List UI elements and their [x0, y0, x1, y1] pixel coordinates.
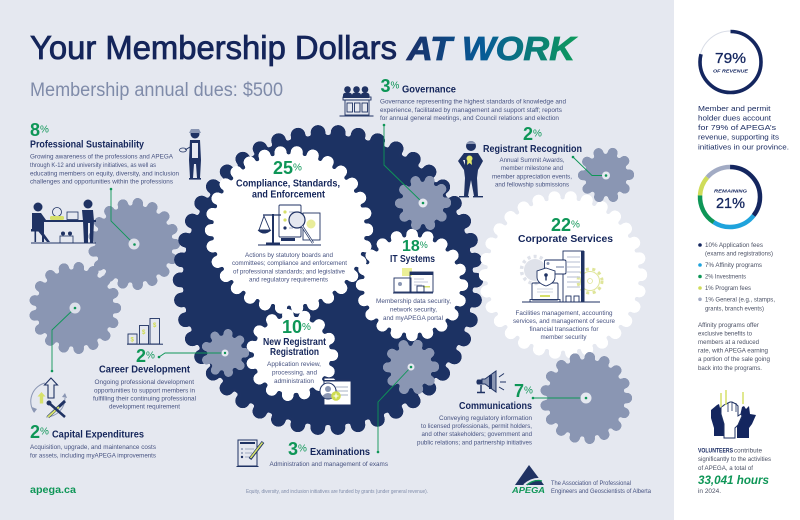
description: Conveying regulatory information: [439, 416, 532, 422]
percent 3: 3: [380, 76, 391, 96]
icon: rising bars: [127, 318, 163, 345]
heading: Registration: [270, 347, 319, 358]
panel: compliance, standards, and enforcement: [232, 158, 347, 284]
description: to licensed professionals, permit holders,: [421, 424, 532, 430]
heading: Corporate Services: [518, 234, 613, 245]
icon: council podium: [340, 86, 374, 116]
gear: registrant recognition: [583, 152, 629, 198]
gear: governance: [400, 180, 446, 226]
revenue description: initiatives in our province.: [698, 142, 789, 151]
leader line: [51, 302, 80, 372]
description: Annual Summit Awards,: [500, 158, 565, 164]
percent 10: 10: [282, 317, 302, 337]
description: Application review,: [267, 362, 321, 368]
legend: 10% Application fees: [705, 243, 763, 249]
leader line: [572, 156, 610, 180]
donut: remaining 21%: [688, 155, 772, 239]
percent 25: 25: [273, 158, 293, 178]
panel: new registrant registration: [263, 317, 351, 405]
description: Administration and management of exams: [270, 462, 388, 468]
panel: professional sustainability: [30, 120, 201, 250]
heading: Communications: [459, 401, 532, 412]
affinity note: back into the programs.: [698, 366, 762, 372]
percent 18: 18: [402, 238, 420, 255]
leader line: [110, 188, 140, 250]
description: Acquisition, upgrade, and maintenance costs: [30, 445, 156, 451]
description: [267, 362, 321, 385]
affinity note: rate, with APEGA earning: [698, 348, 768, 354]
description: [232, 253, 347, 284]
description: [492, 158, 572, 188]
legend: 2% Investments: [705, 274, 746, 280]
percent 2: 2: [30, 422, 40, 442]
affinity note: [698, 323, 770, 372]
icon: scales and documents: [258, 205, 321, 246]
percent 25: %: [293, 162, 302, 174]
percent 18: %: [420, 240, 428, 250]
donut: 79% of revenue: OF REVENUE: [713, 68, 749, 73]
legend: (exams and registrations): [705, 252, 773, 258]
percent 3: 3: [288, 439, 298, 459]
icon: arrows and tools: [31, 378, 67, 417]
title: Your Membership Dollars: [30, 29, 397, 66]
icon: rising bars: $: [142, 330, 146, 336]
percent 2: 2: [136, 346, 146, 366]
revenue description: Member and permit: [698, 104, 772, 113]
icon: secure building: [522, 251, 602, 302]
description: and other stakeholders; government and: [422, 432, 532, 438]
gear: examinations: [388, 344, 434, 390]
description: challenges and opportunities within the professions: [30, 180, 173, 186]
panel: revenue sidebar: [688, 31, 789, 495]
panel: corporate services: [513, 215, 616, 341]
description: [93, 380, 196, 411]
logo: APEGA: APEGA: [511, 486, 545, 495]
description: [380, 100, 566, 122]
donut: remaining 21%: REMAINING: [714, 189, 748, 194]
description: member security: [540, 335, 586, 341]
description: and regulatory requirements: [249, 278, 328, 284]
legend: 1% Program fees: [705, 286, 751, 292]
donut: 79% of revenue: 79%: [715, 50, 746, 67]
icon: engineer: [180, 129, 201, 180]
percent 8: 8: [30, 120, 40, 140]
gear: capital expenditures: [34, 267, 116, 349]
heading: Registrant Recognition: [483, 144, 582, 155]
gear: communications: [545, 357, 627, 439]
icon: desk scene: [31, 200, 96, 244]
website link: apega.ca: [30, 485, 76, 496]
description: Facilities management, accounting: [516, 311, 612, 317]
description: [417, 416, 532, 446]
description: network security,: [390, 308, 437, 314]
icon: rising bars: $: [130, 338, 134, 344]
volunteers callout: VOLUNTEERS: [698, 449, 733, 455]
logo: APEGA: Engineers and Geoscientists of Alberta: [551, 489, 652, 495]
volunteers callout: significantly to the activities: [698, 457, 771, 463]
sidebar background: [674, 0, 800, 520]
percent 2: %: [146, 350, 155, 362]
volunteers callout: of APEGA, a total of: [698, 466, 753, 472]
heading: Governance: [402, 84, 456, 96]
percent 3: %: [298, 444, 307, 454]
description: experience, facilitated by management and support staff; reports: [380, 108, 562, 114]
heading: [263, 337, 327, 358]
volunteers callout: contribute: [734, 449, 763, 455]
description: and myAPEGA portal: [383, 316, 443, 322]
percent 22: %: [571, 220, 580, 230]
affinity note: a portion of the sale going: [698, 357, 770, 363]
leader line: [158, 350, 228, 358]
affinity note: members at a reduced: [698, 340, 759, 346]
description: [376, 299, 451, 322]
volunteers callout: [698, 449, 771, 495]
heading: Examinations: [310, 447, 370, 458]
affinity note: Affinity programs offer: [698, 323, 759, 329]
description: Growing awareness of the professions and APEGA: [30, 154, 173, 160]
description: [30, 154, 179, 186]
gear: IT systems: [362, 234, 462, 336]
description: development requirement: [109, 405, 180, 411]
icon: figure with ribbon: [458, 141, 483, 197]
gear: new registrant: [252, 314, 332, 396]
legend: grants, branch events): [705, 306, 764, 312]
leader line: [383, 124, 428, 208]
description: member milestone and: [501, 166, 563, 172]
title: [30, 29, 577, 67]
percent 10: %: [302, 322, 311, 333]
panel: governance: [340, 76, 566, 208]
heading: Professional Sustainability: [30, 140, 144, 150]
footnote: Equity, diversity, and inclusion initiatives are funded by grants (under general revenue).: [246, 489, 428, 495]
description: Ongoing professional development: [94, 380, 194, 386]
description: services, and management of secure: [513, 319, 616, 325]
panel: communications: [417, 371, 592, 446]
legend: [698, 243, 775, 312]
percent 2: %: [533, 128, 542, 140]
description: committees; compliance and enforcement: [232, 261, 347, 267]
logo: APEGA: [511, 465, 652, 495]
description: Actions by statutory boards and: [245, 253, 333, 259]
logo: APEGA: The Association of Professional: [551, 481, 631, 487]
heading: IT Systems: [390, 254, 435, 265]
description: for assets, including myAPEGA improvements: [30, 454, 156, 460]
panel: registrant recognition: [458, 124, 610, 197]
description: educating members on equity, diversity, and inclusion: [30, 172, 179, 178]
gear: career development: [205, 333, 245, 373]
percent 2: 2: [523, 124, 533, 144]
percent 22: 22: [551, 215, 571, 235]
heading: Capital Expenditures: [52, 430, 144, 441]
description: public relations; and partnership initiatives: [417, 440, 532, 446]
description: through K-12 and university initiatives, as well as: [30, 163, 156, 169]
heading: [236, 179, 340, 201]
leader line: [532, 392, 592, 404]
icon: rising bars: $: [153, 323, 157, 329]
volunteers callout: in 2024.: [698, 489, 721, 495]
percent 8: %: [40, 124, 49, 136]
panel: IT systems: [376, 238, 451, 322]
icon: raised hands: [711, 390, 756, 438]
heading: New Registrant: [263, 337, 327, 348]
heading: Compliance, Standards,: [236, 179, 340, 190]
revenue description: [698, 104, 789, 151]
panel: capital expenditures: [30, 302, 156, 460]
description: administration: [274, 379, 314, 385]
volunteers callout: 33,041 hours: [698, 473, 769, 487]
description: processing, and: [272, 370, 317, 376]
leader line: [377, 364, 414, 453]
gear: compliance: [211, 152, 367, 308]
description: member appreciation events,: [492, 174, 572, 180]
description: for annual general meetings, and Council relations and election: [380, 116, 559, 122]
description: [513, 311, 616, 341]
title: AT WORK: [406, 30, 577, 67]
donut: remaining 21%: 21%: [716, 195, 745, 212]
revenue description: for 79% of APEGA’s: [698, 123, 776, 132]
description: Governance representing the highest standards of knowledge and: [380, 100, 566, 106]
affinity note: exclusive benefits to: [698, 332, 753, 338]
description: and fellowship submissions: [495, 182, 569, 188]
panel: career development: [93, 318, 228, 411]
percent 7: %: [524, 386, 533, 396]
description: financial transactions for: [530, 327, 598, 333]
icon: exam paper: [236, 440, 263, 467]
icon: megaphone: [476, 371, 506, 392]
legend: 1% General (e.g., stamps,: [705, 298, 775, 304]
panel: examinations: [236, 364, 414, 468]
gear: corporate services: [485, 197, 641, 353]
percent 7: 7: [514, 381, 524, 401]
revenue description: holder dues account: [698, 114, 772, 122]
description: Membership data security,: [376, 299, 451, 305]
icon: registrant folder: [320, 378, 351, 405]
gear: professional sustainability: [93, 203, 175, 285]
percent 2: %: [40, 426, 49, 438]
revenue description: revenue, supporting its: [698, 133, 779, 142]
subtitle: Membership annual dues: $500: [30, 80, 283, 101]
percent 3: %: [391, 80, 400, 92]
donut: 79% of revenue: [700, 31, 762, 93]
gear: large navy: [180, 132, 476, 428]
description: of professional standards; and legislative: [233, 270, 346, 276]
heading: Career Development: [99, 365, 191, 376]
description: opportunities to support members in: [94, 388, 195, 394]
heading: and Enforcement: [252, 190, 326, 201]
legend: 7% Affinity programs: [705, 263, 762, 269]
description: fulfilling their continuing professional: [93, 397, 196, 403]
icon: data security: [393, 268, 433, 294]
description: [30, 445, 156, 460]
